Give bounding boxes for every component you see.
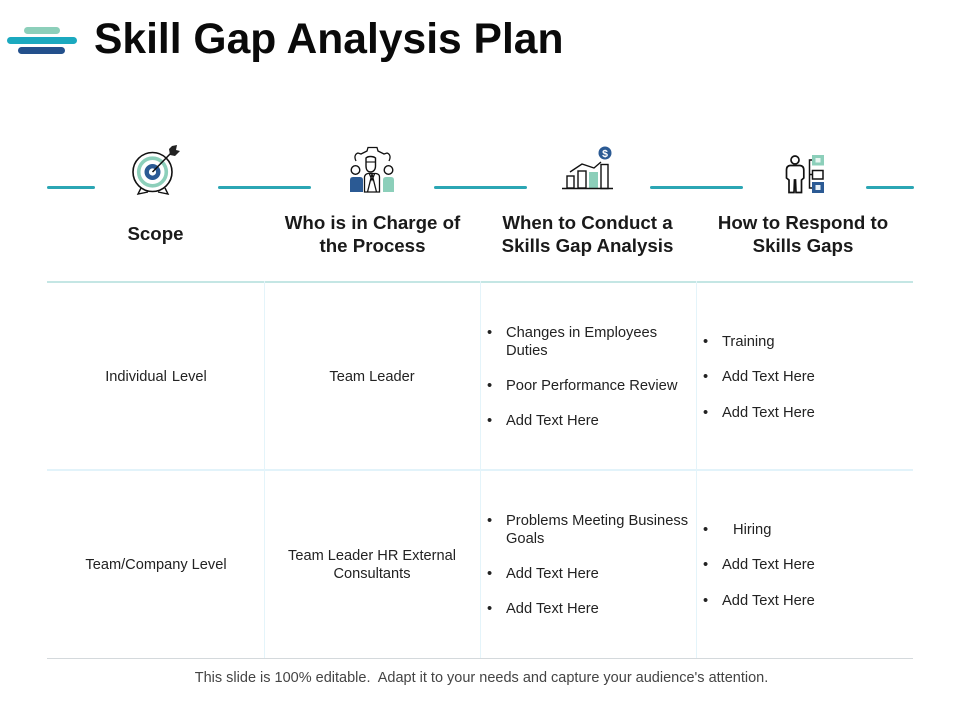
row 1: who: Team Leader [329,369,415,385]
column heading: Who is in Charge [284,212,460,256]
icon: target with arrow [132,145,180,195]
row 2: how list: Add Text Here [722,593,815,609]
title: Skill Gap Analysis Plan [94,15,564,63]
column heading: When to Conduct: When to Conduct a [502,212,673,233]
row 1: how list: Training [722,334,775,350]
column heading: How to Respond [718,212,888,256]
column heading: When to Conduct: Skills Gap Analysis [502,235,673,256]
logo mark: three stacked bars [7,27,77,54]
footer note: This slide is 100% editable. Adapt it to your needs and capture your audience's attention. [195,670,768,686]
column heading: Who is in Charge: the Process [320,235,425,256]
column heading: Who is in Charge: Who is in Charge of [285,212,460,233]
column heading: Scope: Scope [127,223,184,244]
row 2: scope: Team/Company Level [85,557,227,573]
row 1: scope: Individual Level [105,369,207,385]
icon: team and gear [350,146,394,193]
row 2: when list: Problems Meeting Business [506,513,688,529]
row 2: when list: Add Text Here [506,601,599,617]
icon: bar chart with dollar coin: $ [602,148,608,160]
row 2: who [288,548,456,582]
row 2: when list: Goals [506,531,544,547]
row 1: when list: Poor Performance Review [506,378,677,394]
table grid lines [47,281,913,659]
row 2: who: Consultants [333,566,411,582]
row 2: who: Team Leader HR External [288,548,456,564]
row 2: how list: Hiring [733,522,771,538]
column heading: How to Respond: How to Respond to [718,212,888,233]
row 2: when list: Add Text Here [506,566,599,582]
icon: bar chart with dollar coin [562,146,613,190]
row 2: how list [704,522,815,609]
row 1: when list [488,325,678,429]
row 1: when list: Duties [506,343,548,359]
icon: person with org boxes [786,155,824,194]
row 1: how list [704,334,815,421]
row 1: how list: Add Text Here [722,405,815,421]
row 2: how list: Add Text Here [722,557,815,573]
header connector lines [47,186,914,189]
column heading: When to Conduct [502,212,673,256]
row 2: when list [488,513,688,617]
row 1: when list: Add Text Here [506,413,599,429]
row 1: how list: Add Text Here [722,369,815,385]
column heading: How to Respond: Skills Gaps [753,235,853,256]
row 1: when list: Changes in Employees [506,325,657,341]
